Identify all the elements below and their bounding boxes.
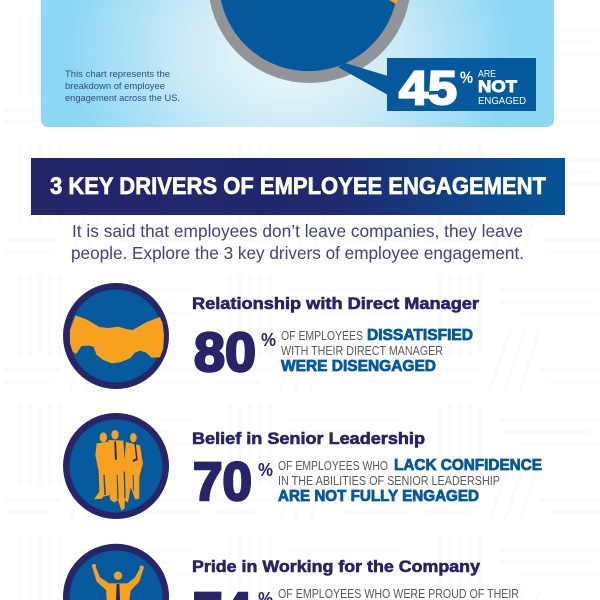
panel: engagement chart bbox=[41, 0, 554, 127]
chart note: This chart represents the bbox=[65, 69, 170, 80]
intro text: It is said that employees don’t leave companies, they leave bbox=[72, 221, 523, 241]
driver 3: pride in company bbox=[63, 544, 519, 600]
chart note: engagement across the US. bbox=[65, 93, 180, 104]
statistic 74% bbox=[194, 592, 272, 600]
icon: handshake bbox=[63, 283, 169, 389]
statistic description bbox=[281, 327, 473, 375]
chart note: breakdown of employee bbox=[65, 81, 165, 92]
statistic description: IN THE ABILITIES OF SENIOR LEADERSHIP bbox=[278, 474, 500, 488]
statistic description: DISSATISFIED bbox=[367, 327, 473, 344]
intro text bbox=[71, 221, 524, 263]
statistic description: ARE NOT FULLY ENGAGED bbox=[278, 488, 479, 505]
statistic description: OF EMPLOYEES WHO bbox=[278, 459, 388, 473]
driver heading: Relationship with Direct Manager bbox=[192, 295, 480, 313]
statistic 80%: 80 bbox=[194, 321, 256, 383]
intro text: people. Explore the 3 key drivers of employee engagement. bbox=[71, 243, 524, 263]
heading banner bbox=[31, 158, 565, 215]
callout: 45% are not engaged: NOT bbox=[478, 77, 518, 96]
statistic description bbox=[278, 457, 542, 505]
driver 1: direct manager bbox=[63, 283, 480, 389]
chart: engagement pie bbox=[210, 0, 409, 83]
icon: business team bbox=[63, 413, 169, 519]
statistic description: LACK CONFIDENCE bbox=[394, 457, 542, 474]
icon: celebrating person bbox=[63, 544, 169, 600]
statistic 70%: 70 bbox=[193, 452, 252, 512]
callout: 45% are not engaged bbox=[338, 58, 536, 114]
driver 2: senior leadership bbox=[63, 413, 542, 519]
driver heading: Pride in Working for the Company bbox=[192, 558, 481, 576]
statistic description: WERE DISENGAGED bbox=[281, 358, 436, 375]
driver heading: Belief in Senior Leadership bbox=[192, 430, 425, 448]
chart note bbox=[65, 69, 180, 104]
heading banner: 3 KEY DRIVERS OF EMPLOYEE ENGAGEMENT bbox=[50, 173, 546, 200]
callout: 45% are not engaged: ENGAGED bbox=[478, 95, 526, 107]
callout: 45% are not engaged: % bbox=[460, 68, 473, 87]
callout: 45% are not engaged: 45 bbox=[399, 61, 457, 114]
statistic description: WITH THEIR DIRECT MANAGER bbox=[281, 344, 443, 358]
statistic 70%: % bbox=[258, 460, 273, 480]
statistic 80%: % bbox=[261, 330, 276, 350]
statistic description: OF EMPLOYEES bbox=[281, 329, 363, 343]
callout: 45% are not engaged: ARE bbox=[478, 69, 496, 80]
